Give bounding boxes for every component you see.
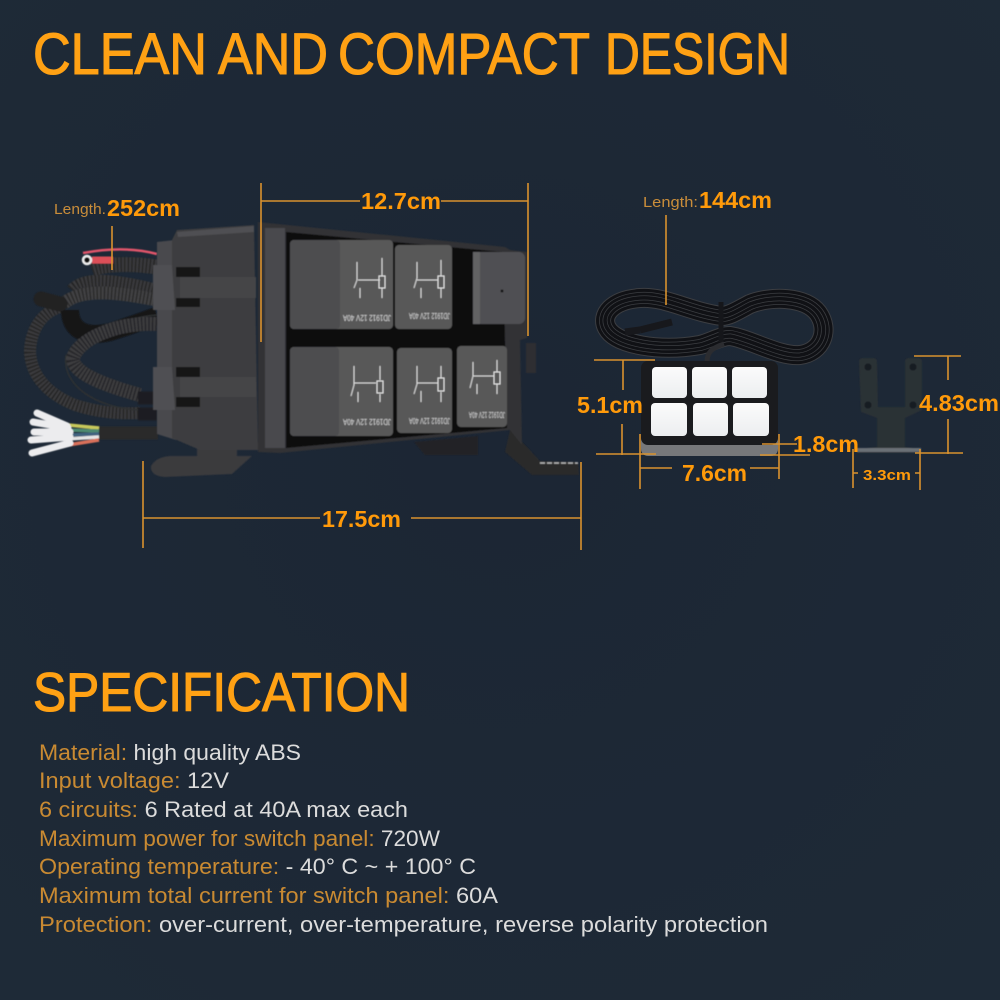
- button 6: [733, 403, 769, 436]
- wire: black cable: [98, 426, 158, 440]
- relay 6: JD1912 12V 40A: [469, 410, 505, 419]
- relay 1: JD1912 12V 40A: [342, 313, 391, 322]
- relay 3: [473, 252, 525, 324]
- relay 4: JD1912 12V 40A: [342, 417, 391, 426]
- cable: ribbon loop: [605, 298, 824, 355]
- rib top: [180, 277, 256, 298]
- spec: maximum current: Maximum total current for switch panel: 60A: [39, 883, 498, 908]
- bracket base: [857, 448, 921, 452]
- cable: round lead: [707, 344, 724, 362]
- dimension lines: [112, 183, 963, 550]
- button 3: [732, 367, 767, 398]
- housing front frame: [258, 222, 527, 453]
- cable: tie: [718, 302, 724, 342]
- relay 4: [290, 347, 393, 436]
- relay 2: JD1912 12V 40A: [409, 311, 450, 320]
- label: 12.7cm: 12.7cm: [361, 188, 441, 214]
- wire: small inner loop: [73, 324, 157, 395]
- panel base: [641, 432, 778, 456]
- wire: red terminal: [92, 256, 113, 264]
- mounting bracket: [857, 358, 922, 453]
- relay 1: [290, 240, 393, 329]
- label: length 252cm: Length.: [54, 201, 106, 218]
- wire: dark bundle: [70, 310, 157, 334]
- housing side strip: [157, 240, 176, 440]
- wire: large outer loop: [30, 307, 140, 413]
- relay 5: [397, 348, 452, 433]
- mounting tab: [197, 442, 237, 456]
- title: AND: [218, 22, 328, 87]
- button 1: [652, 367, 687, 398]
- frame strip: [265, 228, 285, 448]
- label: length 144cm: [643, 187, 772, 213]
- title: [33, 22, 790, 87]
- label: 5.1cm: 5.1cm: [577, 392, 643, 418]
- side tab: [526, 343, 536, 373]
- flat cable coil: [605, 298, 824, 362]
- wire: middle braid: [72, 281, 157, 290]
- bracket holes: [864, 364, 916, 408]
- label: length 252cm: [54, 195, 180, 221]
- rib bottom shadows: [176, 367, 200, 407]
- spec: protection: Protection: over-current, over-temperature, reverse polarity protection: [39, 912, 768, 937]
- spec: input voltage: Input voltage: 12V: [39, 768, 229, 793]
- label: 3.3cm: 3.3cm: [863, 467, 911, 484]
- wire: thin loop: [66, 315, 157, 410]
- button 2: [692, 367, 727, 398]
- connector: black plug: [41, 299, 60, 304]
- wire: red: [83, 249, 157, 254]
- relay 2: [395, 245, 452, 329]
- wiring harness: [30, 249, 158, 453]
- panel body: [641, 361, 778, 445]
- relay box: [151, 222, 579, 477]
- connector: braid ends: [138, 398, 157, 414]
- mounting foot right: [505, 430, 579, 475]
- title: COMPACT: [338, 22, 590, 87]
- spec: circuits: 6 circuits: 6 Rated at 40A max each: [39, 797, 408, 822]
- label: 17.5cm: 17.5cm: [322, 506, 401, 532]
- rib bottom: [180, 377, 256, 397]
- rib top shadows: [176, 267, 200, 307]
- relay 5: JD1912 12V 40A: [409, 416, 450, 425]
- button 5: [693, 403, 728, 436]
- clip bottom: [153, 367, 175, 410]
- specification list: [39, 740, 768, 937]
- connector: white tips: [31, 413, 70, 453]
- wire: lower braid: [63, 293, 157, 304]
- mounting foot left: [151, 456, 252, 477]
- foot highlight: [540, 462, 578, 464]
- title: CLEAN: [33, 22, 207, 87]
- specification heading: SPECIFICATION: [33, 661, 410, 723]
- clip top: [153, 265, 175, 310]
- spec: operating temperature: Operating temperature: - 40° C ~ + 100° C: [39, 854, 476, 879]
- switch panel: [641, 361, 778, 456]
- button 4: [651, 403, 687, 436]
- title: DESIGN: [605, 22, 790, 87]
- label: 7.6cm: 7.6cm: [682, 460, 747, 486]
- bottom tab: [414, 436, 478, 455]
- top lip: [177, 226, 254, 237]
- connector: ring terminal: [83, 256, 91, 264]
- label: 4.83cm: 4.83cm: [919, 390, 999, 416]
- relay 6: [457, 346, 507, 427]
- label: 1.8cm: 1.8cm: [793, 431, 859, 457]
- spec: material: Material: high quality ABS: [39, 740, 301, 765]
- spec: maximum power: Maximum power for switch panel: 720W: [39, 826, 440, 851]
- label: length 252cm: 252cm: [107, 195, 180, 221]
- relay cavity: [286, 232, 507, 448]
- label: length 144cm: 144cm: [699, 187, 772, 213]
- wire: colored leads: [68, 425, 99, 445]
- label: length 144cm: Length:: [643, 194, 698, 211]
- housing side: [172, 225, 258, 450]
- wire: top braid: [92, 265, 157, 269]
- connector: cable plug: [625, 322, 672, 332]
